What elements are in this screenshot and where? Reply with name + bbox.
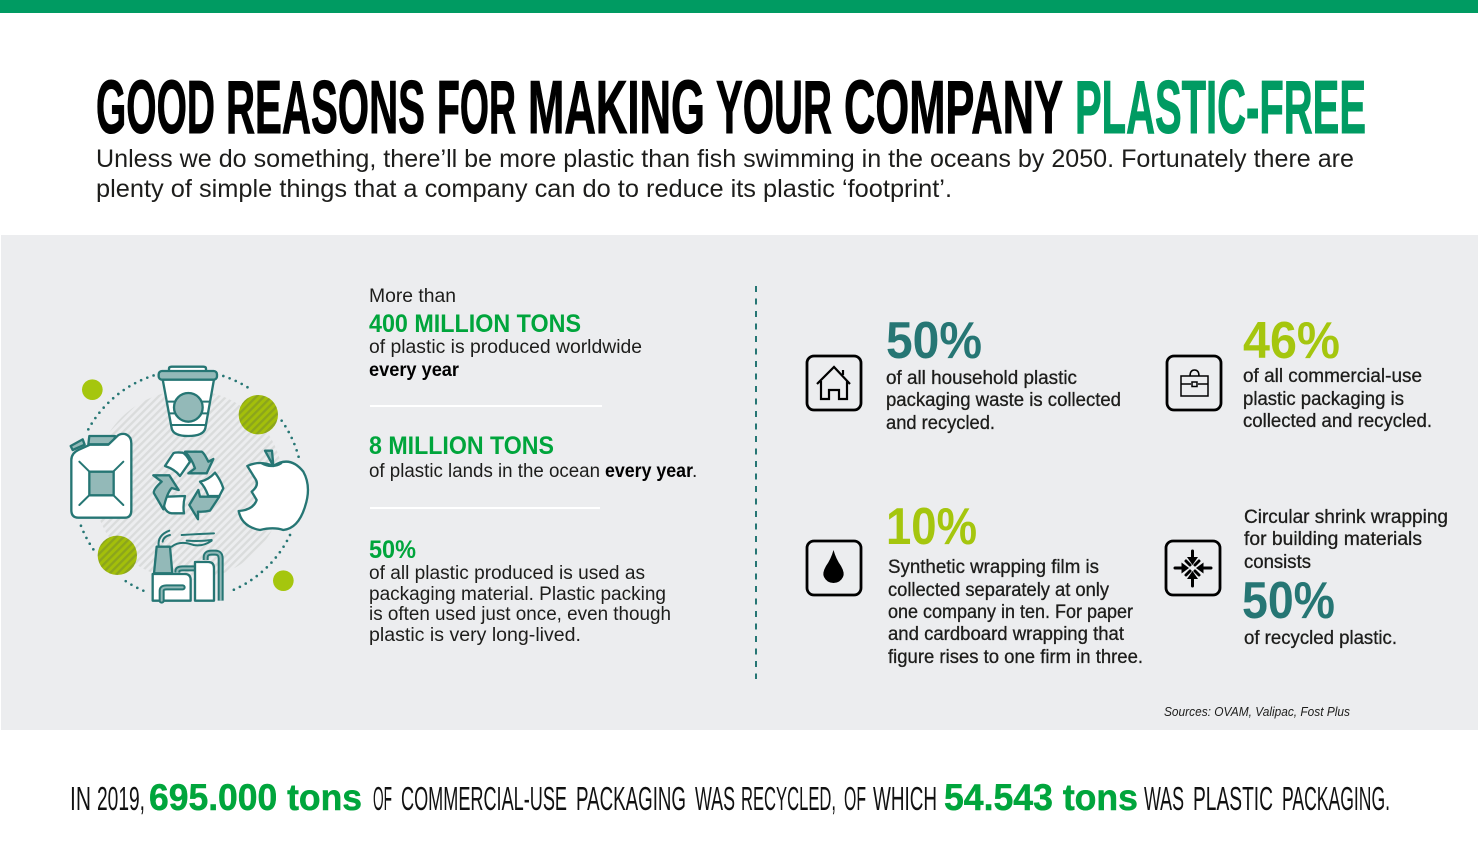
hatched background circle: [93, 390, 283, 580]
top bar: [0, 0, 1478, 13]
stat: 8 million tons: [369, 432, 697, 482]
subtitle: [96, 145, 1354, 203]
stat: household 50 percent: 50%: [886, 312, 982, 370]
illustration: plastic recycling circle: [71, 367, 308, 601]
stat: 400 million tons: More than: [369, 286, 456, 307]
bottom statement: WAS: [1144, 780, 1184, 817]
stat: 50 percent packaging: of all plastic produced is used as: [369, 563, 645, 584]
stat: shrink wrapping 50 percent: Circular shrink wrapping: [1244, 507, 1448, 528]
title: COMPANY: [844, 65, 1063, 149]
stat: shrink wrapping 50 percent: consists: [1244, 552, 1311, 573]
bottom statement: PLASTIC: [1193, 780, 1273, 817]
stat: shrink wrapping 50 percent: of recycled plastic.: [1244, 628, 1397, 649]
stat: wrapping film 10 percent: 10%: [886, 498, 977, 556]
stat: 8 million tons: every year: [605, 461, 694, 482]
stat: shrink wrapping 50 percent: for building materials: [1244, 529, 1422, 550]
icon: compress arrows: [1166, 541, 1220, 595]
stat: household 50 percent: and recycled.: [886, 413, 995, 434]
stat: 50 percent packaging: 50%: [369, 536, 416, 564]
stat: shrink wrapping 50 percent: [1242, 507, 1448, 649]
stat: household 50 percent: of all household plastic: [886, 368, 1077, 389]
bottom statement: IN: [70, 780, 91, 817]
stat: wrapping film 10 percent: Synthetic wrapping film is: [888, 557, 1099, 578]
stat: wrapping film 10 percent: and cardboard wrapping that: [888, 624, 1125, 645]
title: GOOD: [96, 65, 215, 149]
bottom statement: PACKAGING: [576, 780, 686, 817]
stat: wrapping film 10 percent: one company in ten. For paper: [888, 602, 1134, 623]
subtitle: Unless we do something, there’ll be more plastic than fish swimming in the oceans by 2050. Fortunately there are: [96, 145, 1354, 173]
stat: commercial 46 percent: [1243, 312, 1432, 432]
stat: 400 million tons: 400 MILLION TONS: [369, 310, 581, 338]
stat: household 50 percent: [886, 312, 1121, 434]
stat: 50 percent packaging: [369, 536, 671, 646]
bottom statement: [70, 777, 1390, 818]
icon: water drop: [807, 541, 861, 595]
title: FOR: [437, 65, 516, 149]
stat: commercial 46 percent: of all commercial-use: [1243, 366, 1422, 387]
bottom statement: 695.000 tons: [149, 777, 362, 818]
stat: 400 million tons: of plastic is produced worldwide: [369, 337, 642, 358]
stat: 8 million tons: 8 MILLION TONS: [369, 432, 554, 460]
title: REASONS: [226, 65, 425, 149]
stat: wrapping film 10 percent: collected separately at only: [888, 580, 1109, 601]
icon: recycling arrows: [153, 452, 223, 519]
bottom statement: OF: [373, 780, 392, 817]
stat: wrapping film 10 percent: figure rises to one firm in three.: [888, 647, 1143, 668]
icon: house: [807, 356, 861, 410]
dotted ring: [81, 375, 299, 591]
subtitle: plenty of simple things that a company can do to reduce its plastic ‘footprint’.: [96, 175, 952, 203]
stat: wrapping film 10 percent: [886, 498, 1143, 668]
stat: 400 million tons: [369, 286, 642, 381]
title: YOUR: [716, 65, 832, 149]
icon: jerry can: [71, 434, 131, 518]
stat: 50 percent packaging: is often used just once, even though: [369, 604, 671, 625]
icon: factory: [153, 531, 221, 601]
sources: Sources: OVAM, Valipac, Fost Plus: [1164, 705, 1350, 719]
bottom statement: 2019,: [97, 780, 145, 817]
stat: 50 percent packaging: plastic is very long-lived.: [369, 625, 581, 646]
stat: 400 million tons: every year: [369, 360, 460, 381]
icon: bitten apple: [239, 451, 308, 530]
bottom statement: 54.543 tons: [944, 777, 1138, 818]
panel: statistics background: [1, 235, 1478, 730]
lime dots: [82, 379, 294, 591]
stat: commercial 46 percent: 46%: [1243, 312, 1340, 370]
stat: 8 million tons: .: [692, 461, 697, 482]
bottom statement: WAS: [695, 780, 735, 817]
stat: shrink wrapping 50 percent: 50%: [1242, 572, 1335, 630]
stat: 8 million tons: of plastic lands in the ocean: [369, 461, 600, 482]
bottom statement: RECYCLED,: [741, 780, 836, 817]
title: MAKING: [528, 65, 705, 149]
stat: commercial 46 percent: plastic packaging is: [1243, 389, 1404, 410]
bottom statement: COMMERCIAL-USE: [401, 780, 567, 817]
stat: household 50 percent: packaging waste is collected: [886, 390, 1121, 411]
icon: briefcase: [1167, 356, 1221, 410]
bottom statement: WHICH: [873, 780, 937, 817]
bottom statement: OF: [844, 780, 866, 817]
title: [96, 65, 1366, 149]
stat: 50 percent packaging: packaging material. Plastic packing: [369, 584, 666, 605]
icon: coffee cup: [159, 367, 217, 436]
stat: commercial 46 percent: collected and recycled.: [1243, 411, 1432, 432]
